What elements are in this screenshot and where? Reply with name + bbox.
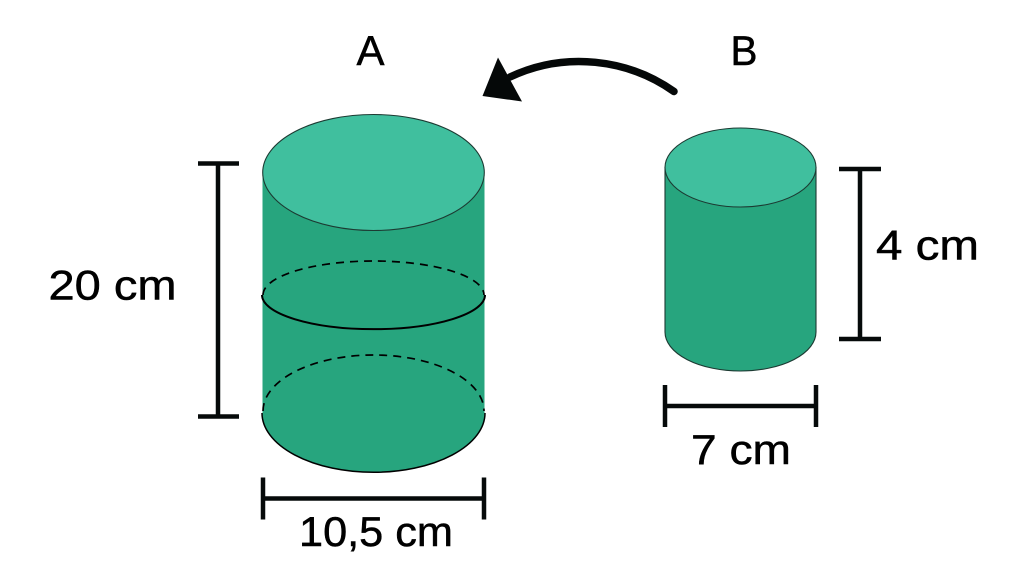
dimension: B diameter: [665, 385, 816, 427]
label: cylinder B: B: [730, 27, 758, 74]
dimension label: 7 cm: 7 cm: [691, 426, 791, 473]
dimension label: 20 cm: 20 cm: [48, 262, 176, 308]
cylinder B: [665, 128, 816, 371]
dimension label: 10,5 cm: 10,5 cm: [299, 508, 453, 555]
dimension: A height: [198, 164, 239, 416]
cylinder A: [262, 114, 485, 472]
arrow: from B to A: [482, 58, 674, 102]
dimension label: 4 cm: 4 cm: [876, 222, 979, 268]
dimension: B height: [839, 169, 881, 339]
dimension: A diameter: [263, 478, 484, 520]
label: cylinder A: A: [356, 27, 385, 74]
